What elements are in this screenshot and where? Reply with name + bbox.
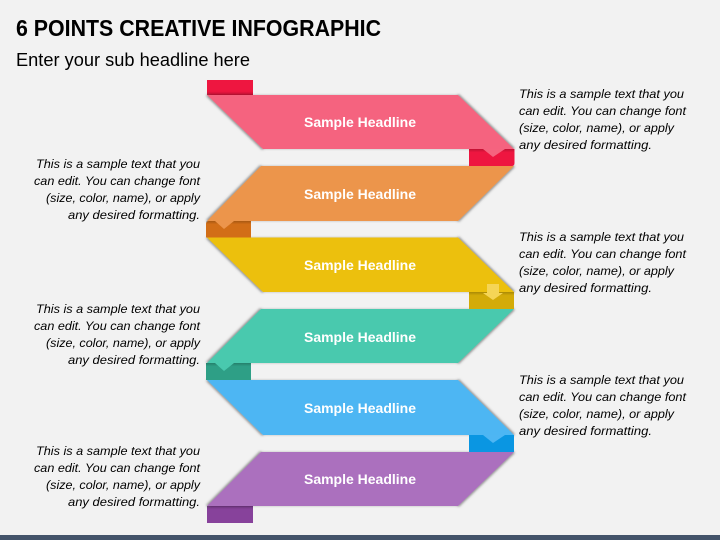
text block 6 (left) [34, 444, 201, 509]
text block 2 (left): (size, color, name), or apply [46, 191, 201, 205]
text block 3 (right): any desired formatting. [519, 281, 652, 295]
tab: pink fold with notch [469, 149, 514, 166]
text block 1 (right): can edit. You can change font [519, 104, 687, 118]
step 4: teal ribbon [207, 309, 514, 363]
text block 1 (right): any desired formatting. [519, 138, 652, 152]
text block 3 (right): This is a sample text that you [519, 230, 684, 244]
text block 2 (left): This is a sample text that you [36, 157, 200, 171]
text block 5 (right): can edit. You can change font [519, 390, 687, 404]
text block 1 (right): This is a sample text that you [519, 87, 684, 101]
step 1: pink ribbon [207, 80, 514, 149]
tab: blue fold with notch [469, 435, 514, 452]
tab: orange fold with notch [206, 221, 251, 238]
step 6: purple ribbon [207, 452, 514, 523]
text block 4 (left) [34, 302, 201, 367]
step 5: blue ribbon: Sample Headline [304, 400, 416, 416]
subtitle: Enter your sub headline here [16, 50, 250, 70]
step 5: blue ribbon [207, 380, 514, 435]
step 6: purple ribbon: Sample Headline [304, 471, 416, 487]
text block 2 (left): any desired formatting. [68, 208, 200, 222]
step 3: yellow ribbon [207, 238, 514, 292]
text block 5 (right) [519, 373, 687, 438]
text block 5 (right): This is a sample text that you [519, 373, 684, 387]
step 2: orange ribbon [207, 166, 514, 221]
text block 5 (right): (size, color, name), or apply [519, 407, 675, 421]
step 1: pink ribbon: Sample Headline [304, 114, 416, 130]
text block 5 (right): any desired formatting. [519, 424, 652, 438]
text block 4 (left): (size, color, name), or apply [46, 336, 201, 350]
step 3: yellow ribbon: Sample Headline [304, 257, 416, 273]
text block 4 (left): This is a sample text that you [36, 302, 200, 316]
text block 6 (left): This is a sample text that you [36, 444, 200, 458]
text block 4 (left): any desired formatting. [68, 353, 200, 367]
tab: yellow fold with arrow [469, 284, 514, 309]
text block 2 (left) [34, 157, 201, 222]
text block 6 (left): (size, color, name), or apply [46, 478, 201, 492]
text block 3 (right): can edit. You can change font [519, 247, 687, 261]
step 4: teal ribbon: Sample Headline [304, 329, 416, 345]
text block 1 (right) [519, 87, 687, 152]
text block 6 (left): any desired formatting. [68, 495, 200, 509]
text block 1 (right): (size, color, name), or apply [519, 121, 675, 135]
title: 6 POINTS CREATIVE INFOGRAPHIC [16, 15, 381, 41]
text block 3 (right) [519, 230, 687, 295]
footer bar [0, 535, 720, 540]
text block 2 (left): can edit. You can change font [34, 174, 201, 188]
step 2: orange ribbon: Sample Headline [304, 186, 416, 202]
text block 4 (left): can edit. You can change font [34, 319, 201, 333]
text block 6 (left): can edit. You can change font [34, 461, 201, 475]
text block 3 (right): (size, color, name), or apply [519, 264, 675, 278]
tab: teal fold with notch [206, 363, 251, 380]
